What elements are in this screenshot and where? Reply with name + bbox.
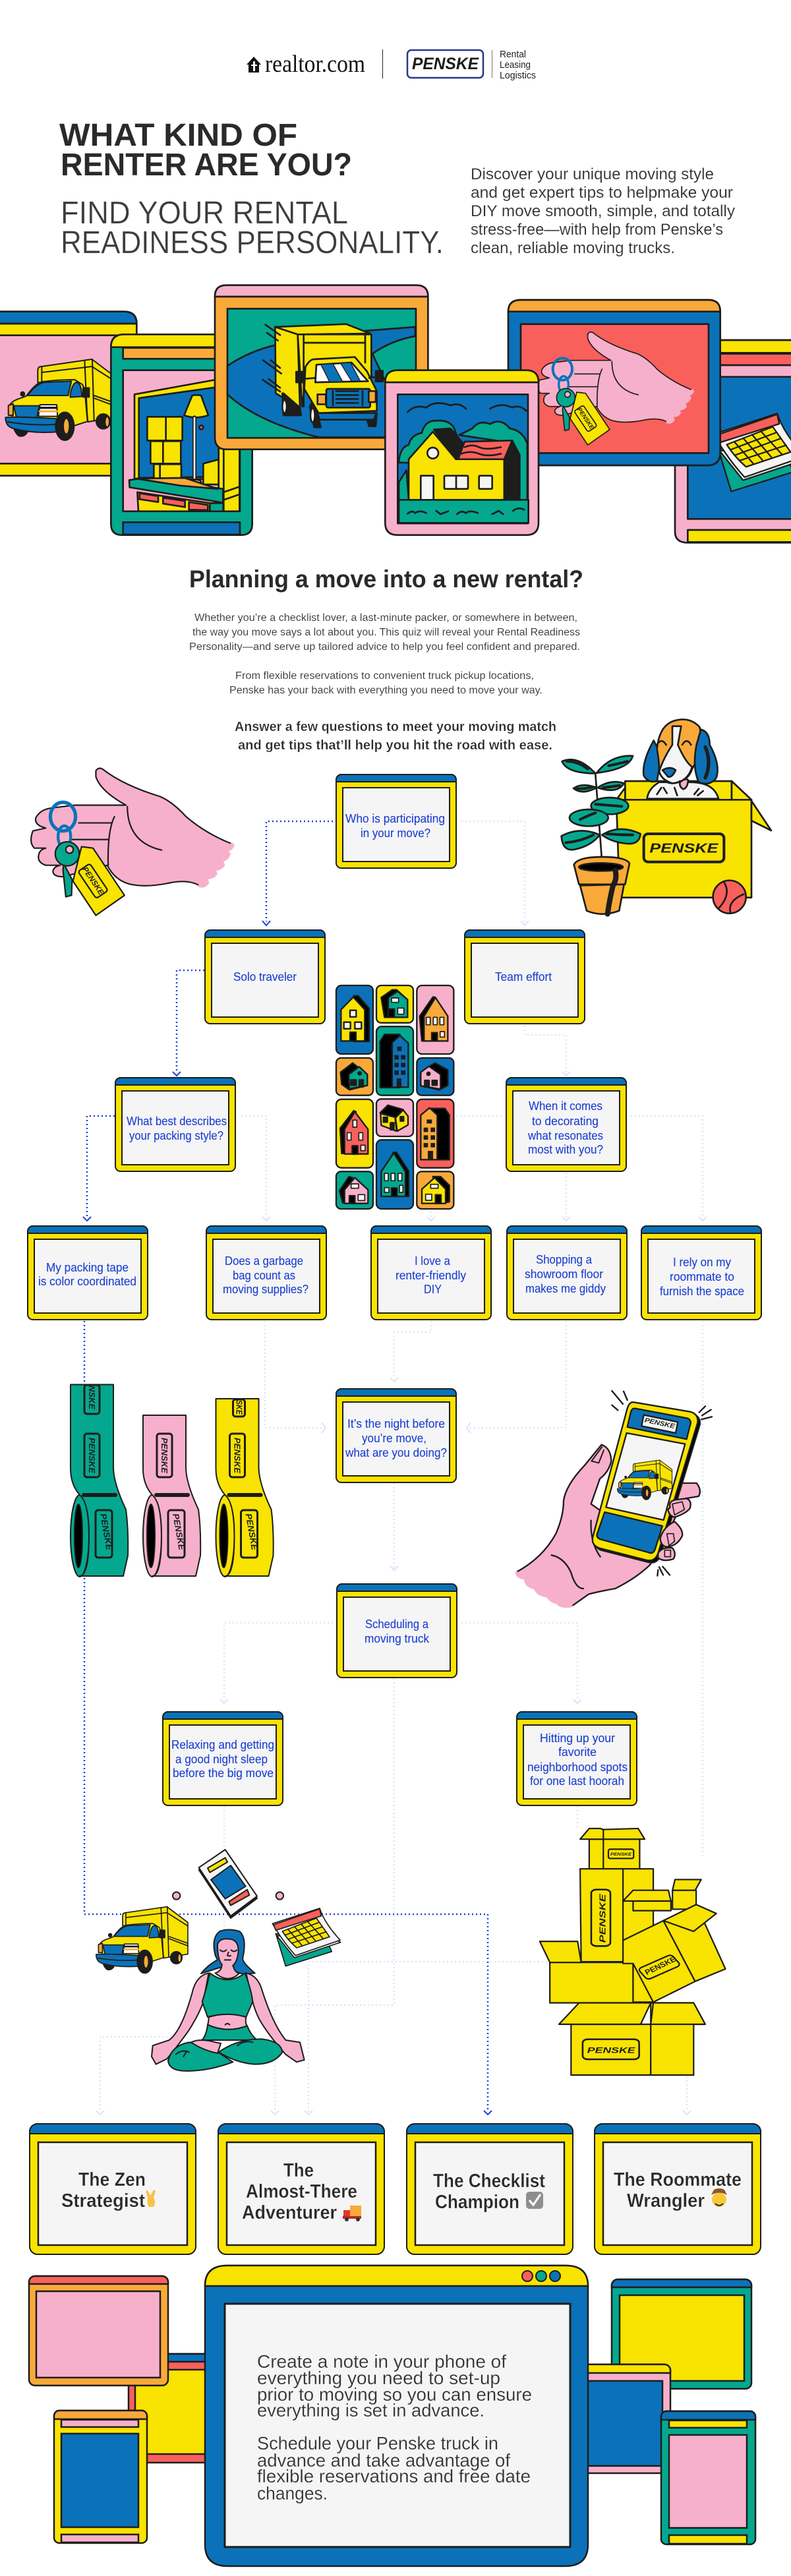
card: roommate furnish: I rely on my bbox=[673, 1256, 731, 1269]
house: yellow on orange bbox=[422, 1177, 450, 1204]
card: relaxing: before the big move bbox=[173, 1767, 274, 1780]
title bbox=[59, 118, 352, 183]
card: the roommate wrangler: Wrangler bbox=[627, 2190, 705, 2211]
card: showroom floor: showroom floor bbox=[525, 1268, 603, 1281]
icon: truck bbox=[96, 1907, 188, 1973]
card: packing tape: is color coordinated bbox=[38, 1275, 136, 1288]
intro text: Discover your unique moving style bbox=[471, 165, 714, 183]
card: team effort: Team effort bbox=[495, 970, 552, 983]
card: relaxing: Relaxing and getting bbox=[171, 1738, 274, 1751]
card: hitting up bbox=[517, 1712, 637, 1805]
card: who is participating bbox=[336, 775, 456, 868]
card: packing style: What best describes bbox=[127, 1115, 227, 1128]
icon: realtor house bbox=[247, 57, 261, 73]
tall box bbox=[580, 1869, 653, 1962]
tilted box: PENSKE bbox=[642, 1955, 678, 1976]
card: scheduling: Scheduling a bbox=[365, 1618, 429, 1631]
panel: tip window bbox=[205, 2266, 588, 2566]
icon: yellow tape roll: SKE bbox=[235, 1400, 244, 1415]
tip text: Create a note in your phone of bbox=[257, 2351, 506, 2372]
panel: middle right bbox=[580, 2364, 670, 2473]
call to action: and get tips that’ll help you hit the road with ease. bbox=[238, 738, 552, 753]
icon: hand with keys bbox=[31, 768, 233, 916]
panel: bottom right bbox=[661, 2411, 755, 2544]
card: garbage bag bbox=[206, 1226, 326, 1320]
panel: truck on road bbox=[215, 285, 428, 450]
header logos bbox=[247, 49, 536, 81]
house: tall blue on teal bbox=[380, 1034, 408, 1088]
call to action bbox=[235, 719, 556, 753]
section intro text bbox=[189, 612, 580, 696]
icon: yellow tape roll: PENSKE bbox=[244, 1513, 260, 1551]
tip text: flexible reservations and free date bbox=[257, 2466, 531, 2486]
house: red on yellow bbox=[340, 1111, 368, 1154]
icon: yellow tape roll bbox=[216, 1399, 274, 1577]
icon: teal tape roll: PENSKE bbox=[98, 1513, 115, 1551]
card: the checklist champion bbox=[407, 2124, 573, 2254]
card: decorating: When it comes bbox=[529, 1099, 602, 1113]
house: orange and black tower bbox=[421, 1108, 450, 1159]
icon: yellow tape roll: PENSKE bbox=[232, 1438, 243, 1473]
house: yellow on pink bbox=[380, 1105, 408, 1131]
card: packing style: your packing style? bbox=[129, 1129, 223, 1142]
panel: calendar on blue bbox=[675, 340, 791, 542]
card: the roommate wrangler: The Roommate bbox=[614, 2169, 742, 2190]
tip text: changes. bbox=[257, 2483, 328, 2503]
card: showroom floor: makes me giddy bbox=[525, 1282, 606, 1295]
section intro text: Whether you’re a checklist lover, a last-minute packer, or somewhere in between, bbox=[194, 612, 577, 624]
house icon grid bbox=[336, 985, 454, 1209]
card: showroom floor bbox=[507, 1226, 627, 1320]
icon: moving truck bbox=[343, 2206, 361, 2221]
side panels behind tip window bbox=[29, 2276, 755, 2544]
panel: top right bbox=[612, 2279, 751, 2389]
realtor.com wordmark: realtor.com bbox=[265, 51, 365, 78]
card: roommate furnish bbox=[641, 1226, 761, 1320]
illustration: hand holding phone bbox=[516, 1391, 712, 1607]
bottom box: PENSKE bbox=[587, 2047, 636, 2055]
icon: victory hand bbox=[146, 2190, 156, 2207]
hero illustration panels bbox=[0, 285, 791, 542]
intro text: and get expert tips to helpmake your bbox=[471, 184, 733, 202]
tip text bbox=[257, 2351, 532, 2503]
panel: house bbox=[385, 370, 539, 535]
subtitle: READINESS PERSONALITY. bbox=[61, 225, 444, 260]
card: the almost-there adventurer: Adventurer bbox=[242, 2202, 337, 2223]
call to action: Answer a few questions to meet your moving match bbox=[235, 719, 556, 734]
card: decorating: most with you? bbox=[528, 1143, 603, 1156]
card: night before: you’re move, bbox=[362, 1432, 426, 1445]
card: team effort bbox=[465, 930, 585, 1024]
panel: lamp and boxes bbox=[111, 334, 252, 535]
title: WHAT KIND OF bbox=[59, 118, 297, 153]
title: RENTER ARE YOU? bbox=[61, 148, 352, 183]
Penske logo: PENSKE bbox=[412, 55, 479, 73]
section intro text: Personality—and serve up tailored advice to help you feel confident and prepared. bbox=[189, 641, 580, 653]
card: the zen strategist bbox=[30, 2124, 196, 2254]
card: night before bbox=[336, 1389, 456, 1482]
icon: calendar bbox=[272, 1908, 341, 1966]
card: scheduling bbox=[337, 1584, 457, 1678]
card: the almost-there adventurer: The bbox=[283, 2160, 314, 2181]
card: showroom floor: Shopping a bbox=[536, 1253, 593, 1266]
illustration: tape rolls bbox=[71, 1384, 274, 1577]
person bbox=[152, 1929, 305, 2071]
card: packing style bbox=[115, 1078, 235, 1171]
card: hitting up: favorite bbox=[558, 1745, 597, 1759]
house: pink on teal bbox=[339, 1177, 368, 1204]
Penske descriptor: Rental bbox=[500, 49, 526, 60]
Penske descriptor: Logistics bbox=[500, 71, 536, 81]
illustration: dog in Penske box with plant and ball: PENSKE bbox=[649, 840, 719, 856]
Penske descriptor bbox=[500, 49, 536, 81]
card: scheduling: moving truck bbox=[365, 1632, 430, 1645]
card: renter-friendly DIY: DIY bbox=[424, 1283, 442, 1296]
card: renter-friendly DIY: renter-friendly bbox=[396, 1269, 466, 1282]
Penske descriptor: Leasing bbox=[500, 60, 531, 71]
card: the almost-there adventurer bbox=[218, 2124, 384, 2254]
card: night before: what are you doing? bbox=[345, 1446, 447, 1459]
card: the roommate wrangler bbox=[595, 2124, 761, 2254]
card: hitting up: Hitting up your bbox=[540, 1732, 615, 1745]
card: roommate furnish: furnish the space bbox=[660, 1285, 744, 1298]
icon: pink tape roll: PENSKE bbox=[160, 1438, 169, 1473]
house: teal on yellow bbox=[381, 990, 407, 1017]
middle left box bbox=[540, 1941, 653, 2003]
intro text bbox=[471, 165, 735, 257]
card: decorating: to decorating bbox=[532, 1115, 599, 1128]
top box bbox=[580, 1829, 645, 1869]
card: hitting up: neighborhood spots bbox=[527, 1761, 628, 1774]
icon: cowboy face bbox=[711, 2188, 727, 2207]
icon: teal tape roll: NSKE bbox=[87, 1386, 97, 1409]
card: who is participating: in your move? bbox=[361, 827, 430, 840]
subtitle: FIND YOUR RENTAL bbox=[61, 196, 348, 231]
card: hitting up: for one last hoorah bbox=[530, 1774, 624, 1788]
icon: pink tape roll bbox=[143, 1415, 200, 1577]
card: the zen strategist: The Zen bbox=[78, 2169, 146, 2190]
card: relaxing: a good night sleep bbox=[175, 1753, 268, 1766]
card: roommate furnish: roommate to bbox=[670, 1270, 734, 1283]
house: teal on blue bbox=[381, 1152, 409, 1196]
tall box: PENSKE bbox=[598, 1894, 608, 1943]
house: pink on blue bbox=[421, 1063, 448, 1090]
tip text: advance and take advantage of bbox=[257, 2450, 510, 2471]
illustration: stacked Penske boxes bbox=[540, 1829, 726, 2075]
card: packing tape bbox=[28, 1226, 148, 1320]
card: who is participating: Who is participating bbox=[345, 812, 445, 825]
tilted box bbox=[623, 1904, 726, 2002]
card: the zen strategist: Strategist bbox=[61, 2190, 145, 2211]
flow connectors bbox=[83, 821, 707, 2115]
tip text: Schedule your Penske truck in bbox=[257, 2433, 498, 2453]
subtitle bbox=[61, 196, 444, 260]
card: night before: It’s the night before bbox=[347, 1417, 445, 1430]
illustration: hand holding phone: PENSKE bbox=[644, 1417, 676, 1430]
tip text: prior to moving so you can ensure bbox=[257, 2384, 532, 2405]
card: the checklist champion: The Checklist bbox=[433, 2171, 545, 2192]
card: the almost-there adventurer: Almost-There bbox=[246, 2181, 357, 2202]
house: orange on pink bbox=[420, 997, 448, 1041]
bottom box bbox=[559, 2003, 705, 2075]
house: teal on orange bbox=[341, 1063, 367, 1090]
icon: pink tape roll: PENSKE bbox=[171, 1513, 187, 1551]
panel: hand with keys bbox=[508, 300, 720, 465]
card: decorating: what resonates bbox=[527, 1129, 603, 1142]
panel: top left bbox=[29, 2276, 168, 2386]
section intro text: From flexible reservations to convenient truck pickup locations, bbox=[235, 670, 534, 682]
card: garbage bag: moving supplies? bbox=[223, 1283, 308, 1296]
card: garbage bag: bag count as bbox=[233, 1269, 295, 1282]
window buttons bbox=[522, 2271, 560, 2281]
small open box bbox=[623, 1879, 701, 1911]
icon: teal tape roll: PENSKE bbox=[87, 1438, 97, 1473]
card: garbage bag: Does a garbage bbox=[225, 1254, 303, 1268]
section heading: Planning a move into a new rental? bbox=[189, 566, 583, 593]
tip text: everything is set in advance. bbox=[257, 2400, 484, 2420]
house: yellow on blue bbox=[341, 996, 369, 1041]
illustration: dog in Penske box with plant and ball bbox=[562, 719, 771, 914]
card: solo traveler: Solo traveler bbox=[233, 970, 297, 983]
card: solo traveler bbox=[205, 930, 325, 1024]
section intro text: Penske has your back with everything you need to move your way. bbox=[229, 685, 542, 696]
card: relaxing bbox=[163, 1712, 283, 1805]
card: renter-friendly DIY: I love a bbox=[415, 1254, 451, 1268]
panel: truck on pink bbox=[0, 312, 138, 476]
card: the checklist champion: Champion bbox=[435, 2192, 519, 2213]
card: renter-friendly DIY bbox=[371, 1226, 491, 1320]
Penske logo bbox=[407, 50, 483, 78]
intro text: clean, reliable moving trucks. bbox=[471, 239, 675, 257]
panel: bottom left bbox=[54, 2411, 147, 2543]
top box: PENSKE bbox=[610, 1852, 632, 1857]
intro text: DIY move smooth, simple, and totally bbox=[471, 202, 735, 220]
icon: check box bbox=[526, 2192, 543, 2209]
card: packing tape: My packing tape bbox=[46, 1261, 129, 1274]
section intro text: the way you move says a lot about you. This quiz will reveal your Rental Readiness bbox=[192, 627, 580, 638]
icon: floating phone bbox=[199, 1850, 257, 1918]
tip text: everything you need to set-up bbox=[257, 2368, 500, 2388]
intro text: stress-free—with help from Penske’s bbox=[471, 221, 723, 239]
card: decorating bbox=[506, 1078, 626, 1171]
icon: teal tape roll bbox=[71, 1384, 128, 1577]
panel: middle left bbox=[129, 2354, 214, 2463]
illustration: meditating person with truck, phone and calendar bbox=[96, 1850, 341, 2071]
